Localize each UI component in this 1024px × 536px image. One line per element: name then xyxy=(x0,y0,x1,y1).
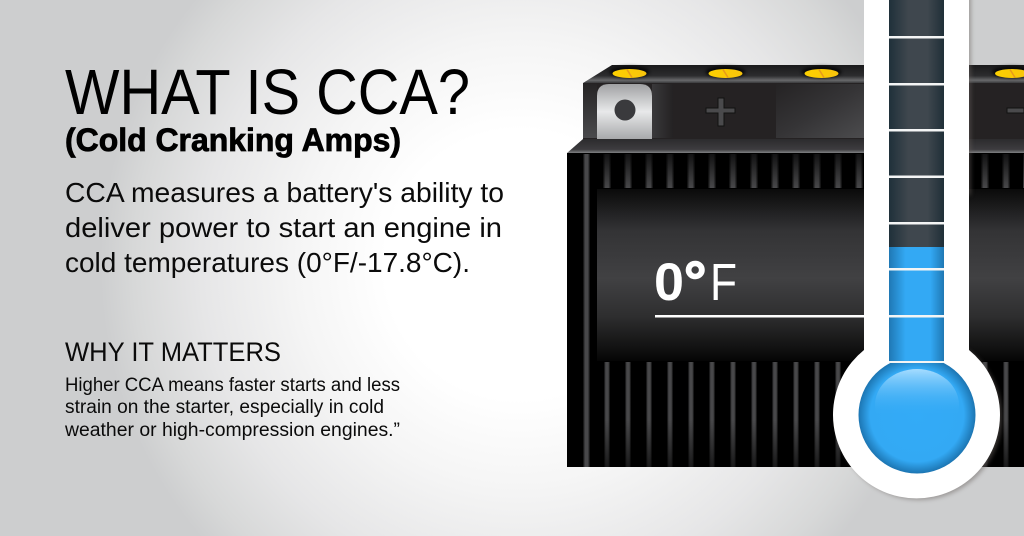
battery lip xyxy=(567,139,1024,153)
bulb highlight xyxy=(875,369,959,441)
thermometer xyxy=(833,0,1002,500)
why it matters text block: strain on the starter, especially in cold xyxy=(65,397,384,418)
why it matters text block xyxy=(64,375,400,441)
plus symbol xyxy=(706,98,735,126)
temperature label: F xyxy=(710,254,737,312)
definition text block: deliver power to start an engine in xyxy=(65,212,502,243)
battery label panel xyxy=(597,189,1024,361)
why it matters text block: weather or high-compression engines.” xyxy=(64,420,400,441)
title: WHAT IS CCA? xyxy=(65,56,470,128)
upper ribs xyxy=(597,154,1024,188)
lower ribs xyxy=(597,362,1024,467)
temperature label xyxy=(654,249,737,312)
battery upper wall xyxy=(583,83,1024,140)
definition text block xyxy=(65,177,504,278)
temperature label: 0 xyxy=(654,253,684,312)
thermometer scale ticks xyxy=(889,36,944,363)
thermometer white casing xyxy=(833,0,1000,498)
thermometer empty tube xyxy=(889,0,944,247)
thermometer shadow xyxy=(836,0,1002,500)
yellow screws xyxy=(610,66,1024,78)
minus symbol xyxy=(1007,108,1024,113)
subtitle: (Cold Cranking Amps) xyxy=(65,122,401,158)
metal terminal xyxy=(597,84,652,139)
battery illustration xyxy=(567,65,1024,467)
battery body xyxy=(567,153,1024,467)
definition text block: cold temperatures (0°F/-17.8°C). xyxy=(65,247,470,278)
side rib xyxy=(583,154,590,467)
battery top surface xyxy=(583,65,1024,83)
temperature label: ° xyxy=(684,249,706,312)
definition text block: CCA measures a battery's ability to xyxy=(65,177,504,208)
why it matters text block: Higher CCA means faster starts and less xyxy=(65,375,400,396)
thermometer blue fill xyxy=(889,247,944,362)
temperature pointer line xyxy=(655,315,870,318)
thermometer bulb xyxy=(858,356,976,474)
heading: why it matters: WHY IT MATTERS xyxy=(65,337,281,367)
